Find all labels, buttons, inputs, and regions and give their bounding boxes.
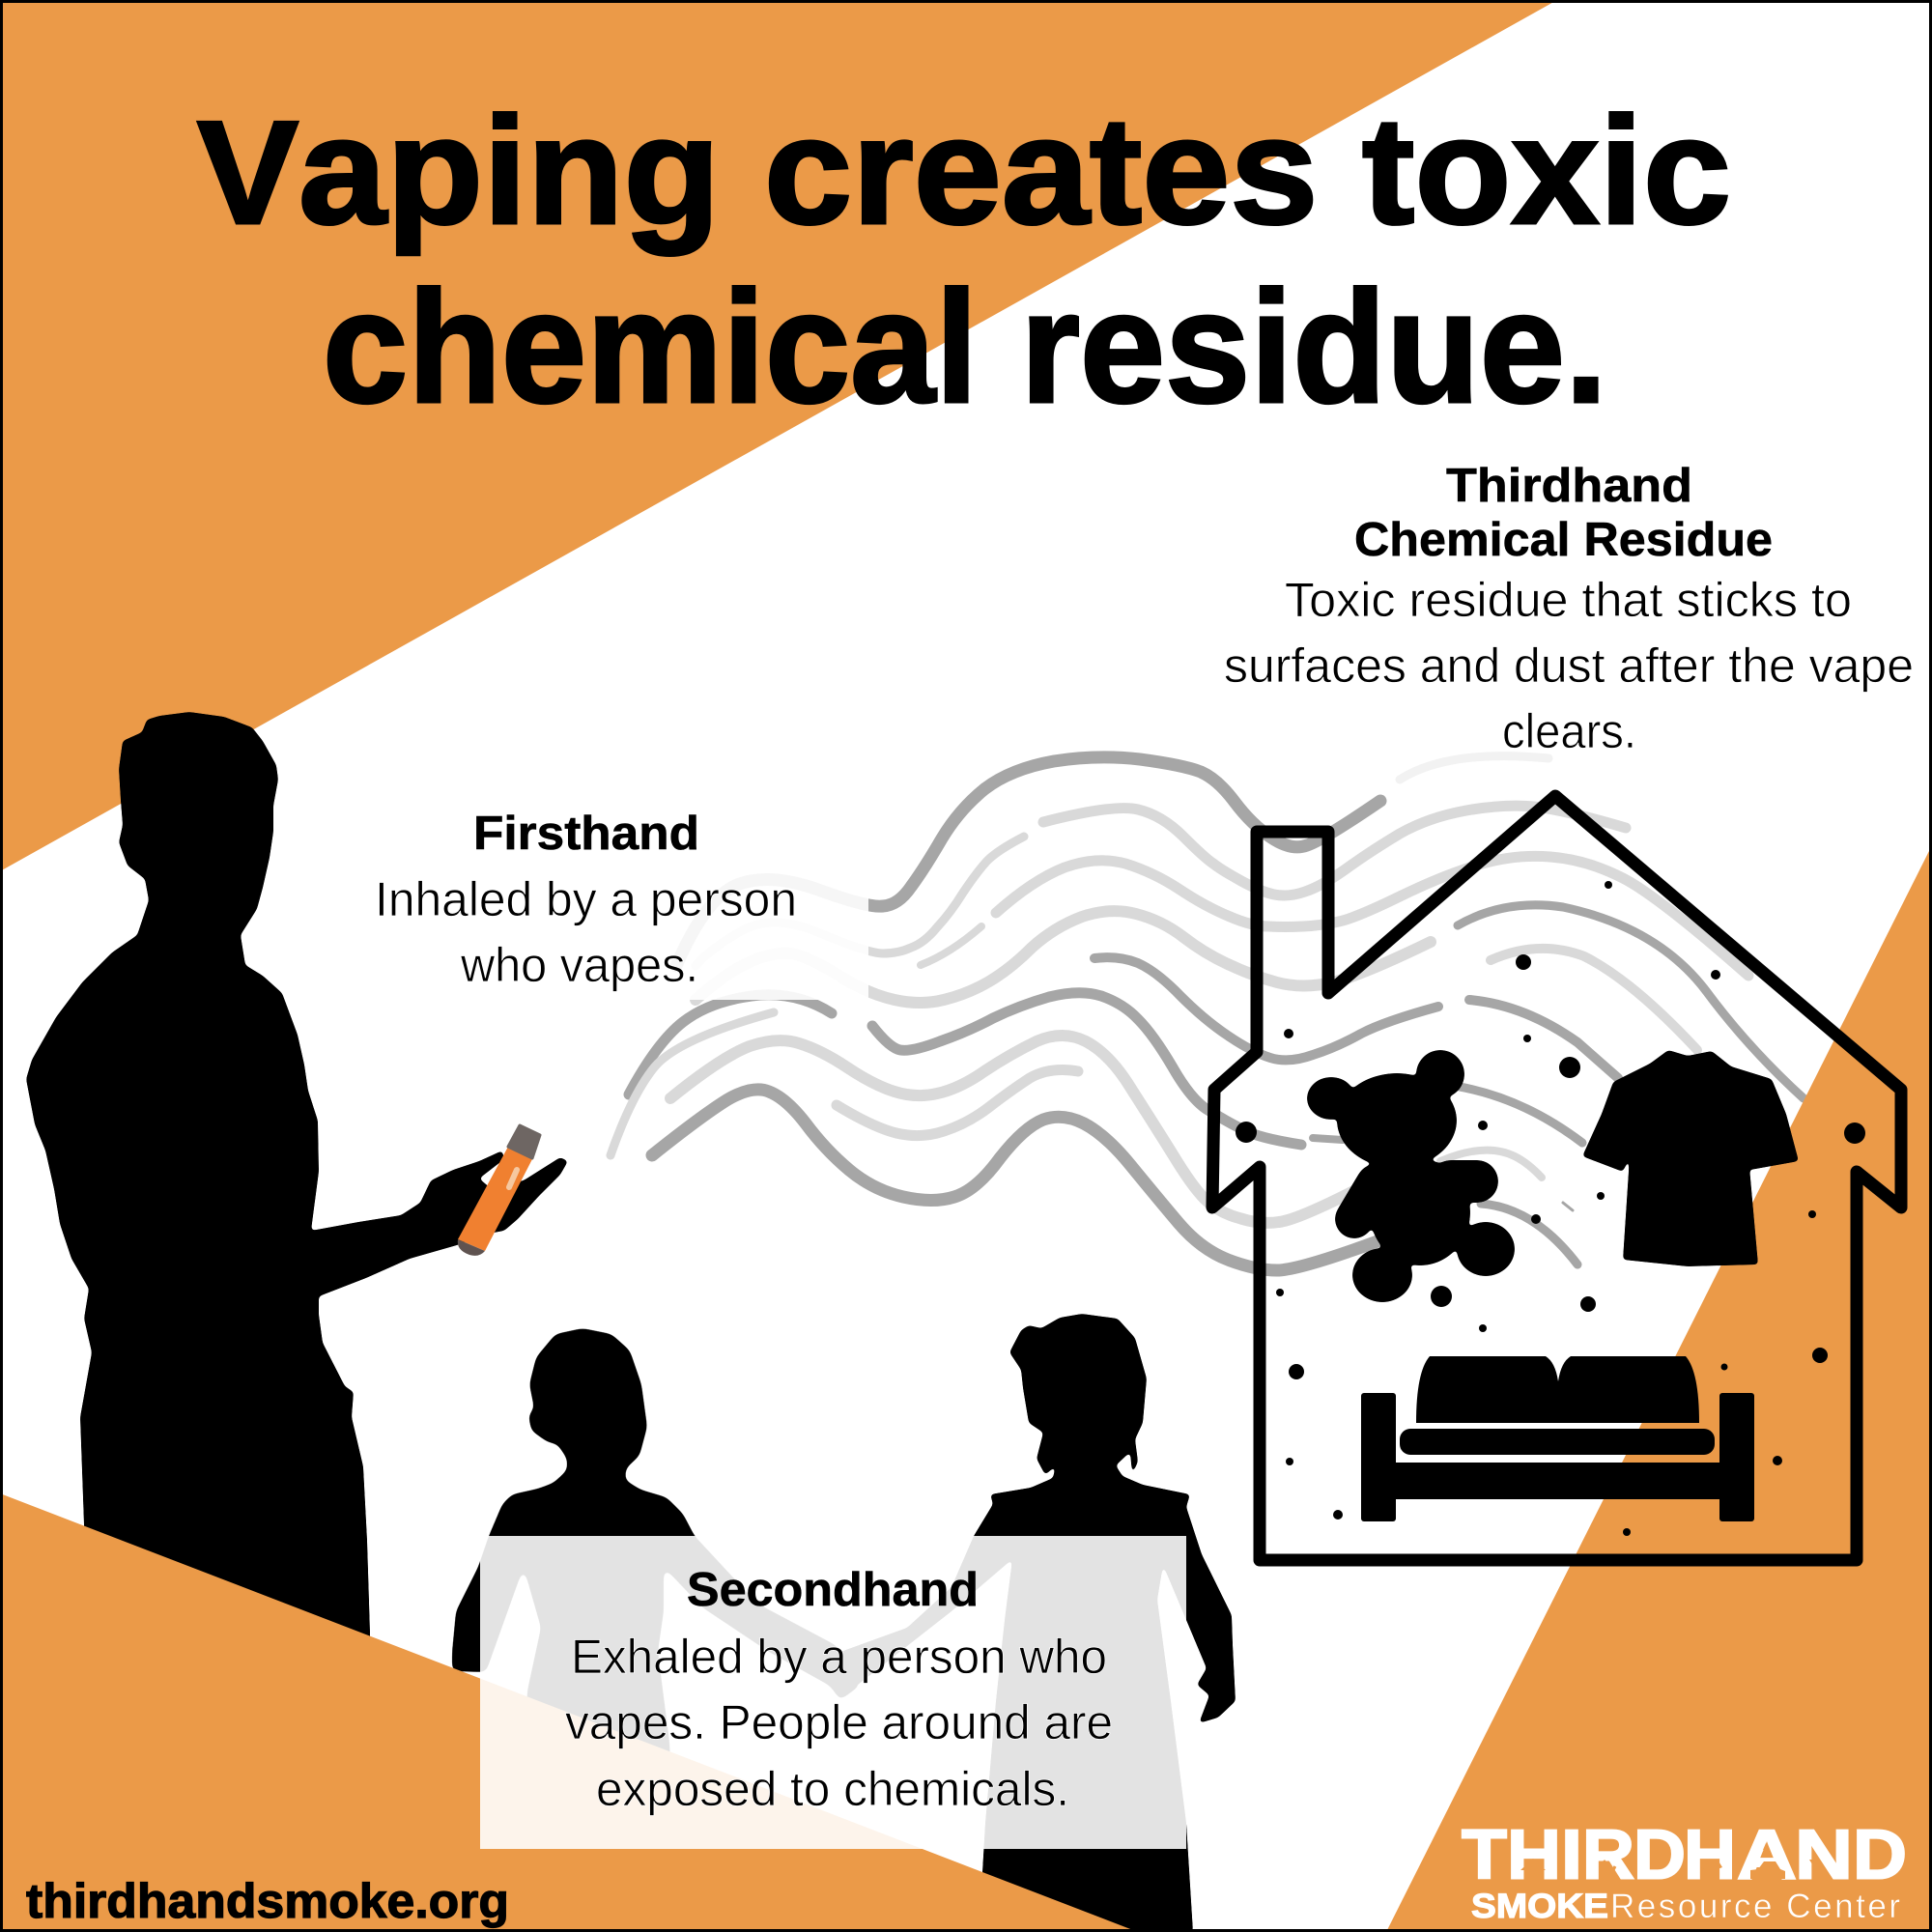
text block: firsthand: Inhaled by a person (375, 872, 797, 926)
logo: Thirdhand Smoke Resource Center: N (1795, 1816, 1853, 1893)
text block: thirdhand chemical residue (1224, 460, 1914, 758)
icon: logo car window notch (1763, 1843, 1769, 1850)
logo: Thirdhand Smoke Resource Center (1462, 1816, 1907, 1925)
text block: thirdhand chemical residue: Thirdhand (1446, 460, 1692, 512)
title (197, 86, 1731, 436)
logo: Thirdhand Smoke Resource Center: A (1737, 1816, 1797, 1893)
logo: Thirdhand Smoke Resource Center: T (1462, 1816, 1507, 1893)
icon: teddy bear (1307, 1050, 1515, 1302)
title: Vaping creates toxic (197, 86, 1731, 256)
text block: firsthand (375, 808, 797, 992)
icon: logo car (1750, 1861, 1785, 1879)
icon: t-shirt (1582, 1050, 1799, 1266)
silhouette: child right (830, 1314, 1236, 1932)
silhouette: adult vaping (26, 712, 568, 1739)
icon: vape device (458, 1125, 540, 1256)
panel: firsthand translucent backing (357, 787, 868, 1000)
text block: firsthand: who vapes. (460, 938, 698, 992)
smoke waves (611, 756, 1804, 1270)
text block: secondhand: Secondhand (687, 1564, 979, 1616)
silhouette: child left (452, 1328, 860, 1884)
icon: logo dog (1809, 1860, 1831, 1881)
title: chemical residue. (323, 258, 1607, 436)
top-left orange background triangle (0, 0, 1557, 871)
text block: thirdhand chemical residue: Toxic residue that sticks to (1285, 573, 1852, 627)
right orange background shape (1386, 845, 1932, 1932)
text block: thirdhand chemical residue: Chemical Residue (1354, 514, 1773, 566)
logo: Thirdhand Smoke Resource Center: H (1507, 1816, 1561, 1893)
logo: Thirdhand Smoke Resource Center: SMOKE (1471, 1888, 1608, 1925)
text block: thirdhand chemical residue: surfaces and dust after the vape (1224, 639, 1914, 693)
icon: logo shirt (1700, 1860, 1722, 1881)
logo: Thirdhand Smoke Resource Center: I (1561, 1816, 1582, 1893)
logo: Thirdhand Smoke Resource Center: D (1634, 1816, 1686, 1893)
text block: secondhand: Exhaled by a person who (571, 1630, 1107, 1684)
icon: logo stroller (1604, 1861, 1619, 1881)
panel: secondhand translucent backing (480, 1536, 1186, 1849)
icon: house outline (1212, 796, 1901, 1560)
icon: residue dots (1236, 881, 1865, 1536)
text block: thirdhand chemical residue: clears. (1502, 704, 1636, 758)
text block: secondhand: vapes. People around are (565, 1695, 1113, 1749)
text block: firsthand: Firsthand (473, 808, 699, 860)
text block: secondhand: exposed to chemicals. (596, 1762, 1069, 1816)
logo: Thirdhand Smoke Resource Center: D (1853, 1816, 1907, 1893)
website url: thirdhandsmoke.org (26, 1874, 509, 1928)
text block: secondhand (565, 1564, 1113, 1816)
icon: logo house (1520, 1859, 1546, 1881)
logo: Thirdhand Smoke Resource Center: Resource Center (1610, 1888, 1900, 1925)
bottom-left orange background triangle (0, 1493, 1138, 1932)
logo: Thirdhand Smoke Resource Center: H (1684, 1816, 1736, 1893)
icon: sofa (1361, 1356, 1754, 1521)
logo: Thirdhand Smoke Resource Center: R (1582, 1816, 1634, 1893)
